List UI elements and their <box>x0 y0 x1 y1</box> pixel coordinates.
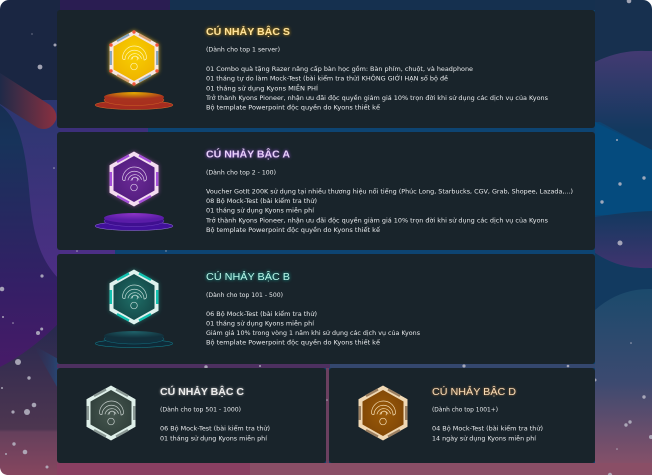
icon: purple podium <box>95 213 173 230</box>
icon: purple medal <box>110 152 158 206</box>
text block: benefits C: 06 Bộ Mock-Test (bài kiểm tra thử) <box>160 424 270 433</box>
heading: CÚ NHẢY BẬC D <box>432 385 516 398</box>
heading: CÚ NHẢY BẬC B <box>206 270 290 283</box>
icon: teal medal <box>110 270 158 324</box>
panel: tier D <box>329 368 595 463</box>
heading: CÚ NHẢY BẬC S <box>206 25 290 38</box>
heading: CÚ NHẢY BẬC C <box>160 385 244 398</box>
white rounded corners <box>0 0 652 9</box>
text block: benefits S <box>205 45 549 111</box>
text block: benefits S: 01 Combo quà tặng Razer nâng cấp bàn học gồm: Bàn phím, chuột, và headphone <box>206 65 473 73</box>
text block: benefits B: Bộ template Powerpoint độc quyền do Kyons thiết kế <box>206 339 380 347</box>
text block: benefits A <box>205 168 573 234</box>
text block: benefits A: Voucher GotIt 200K sử dụng tại nhiều thương hiệu nổi tiếng (Phúc Long, Starbucks, CGV, Grab, Shopee, Lazada,...) <box>206 186 573 195</box>
icon: gold podium <box>95 92 173 110</box>
text block: benefits S: Bộ template Powerpoint độc quyền do Kyons thiết kế <box>206 104 380 112</box>
text block: benefits D: 04 Bộ Mock-Test (bài kiểm tra thử) <box>432 424 543 433</box>
icon: silver medal <box>86 386 136 440</box>
text block: benefits B: (Dành cho top 101 - 500) <box>206 291 283 299</box>
text block: benefits B: 01 tháng sử dụng Kyons miễn phí <box>206 318 314 327</box>
panel: tier S <box>57 10 595 128</box>
icon: teal podium <box>95 331 173 348</box>
text block: benefits S: Trở thành Kyons Pioneer, nhận ưu đãi độc quyền giảm giá 10% trọn đời khi sử dụng các dịch vụ của Kyons <box>205 94 549 102</box>
text block: benefits D: (Dành cho top 1001+) <box>432 405 498 413</box>
icon: gold medal <box>109 30 159 86</box>
panel: tier C <box>57 368 326 463</box>
text block: benefits B <box>206 291 421 347</box>
text block: benefits D: 14 ngày sử dụng Kyons miễn phí <box>432 433 536 442</box>
text block: benefits C: (Dành cho top 501 - 1000) <box>160 405 241 413</box>
panel: tier A <box>57 132 595 250</box>
icon: bronze medal <box>358 386 408 440</box>
text block: benefits B: 06 Bộ Mock-Test (bài kiểm tra thử) <box>206 309 317 318</box>
text block: benefits S: 01 tháng sử dụng Kyons MIỄN PHÍ <box>206 82 318 92</box>
text block: benefits A: 08 Bộ Mock-Test (bài kiểm tra thử) <box>206 196 317 205</box>
text block: benefits B: Giảm giá 10% trong vòng 1 năm khi sử dụng các dịch vụ của Kyons <box>206 329 421 337</box>
text block: benefits D <box>432 405 543 442</box>
text block: benefits S: 01 tháng tự do làm Mock-Test (bài kiểm tra thử) KHÔNG GIỚI HẠN số bộ đề <box>206 74 448 83</box>
text block: benefits C: 01 tháng sử dụng Kyons miễn phí <box>160 433 267 442</box>
text block: benefits A: (Dành cho top 2 - 100) <box>206 168 276 176</box>
panel: tier B <box>57 254 595 364</box>
text block: benefits A: Bộ template Powerpoint độc quyền do Kyons thiết kế <box>206 226 380 234</box>
text block: benefits C <box>160 405 270 442</box>
heading: CÚ NHẢY BẬC A <box>206 148 290 160</box>
text block: benefits A: Trở thành Kyons Pioneer, nhận ưu đãi độc quyền giảm giá 10% trọn đời khi sử dụng các dịch vụ của Kyons <box>205 216 549 224</box>
text block: benefits A: 01 tháng sử dụng Kyons miễn phí <box>206 206 314 215</box>
text block: benefits S: (Dành cho top 1 server) <box>206 45 280 53</box>
